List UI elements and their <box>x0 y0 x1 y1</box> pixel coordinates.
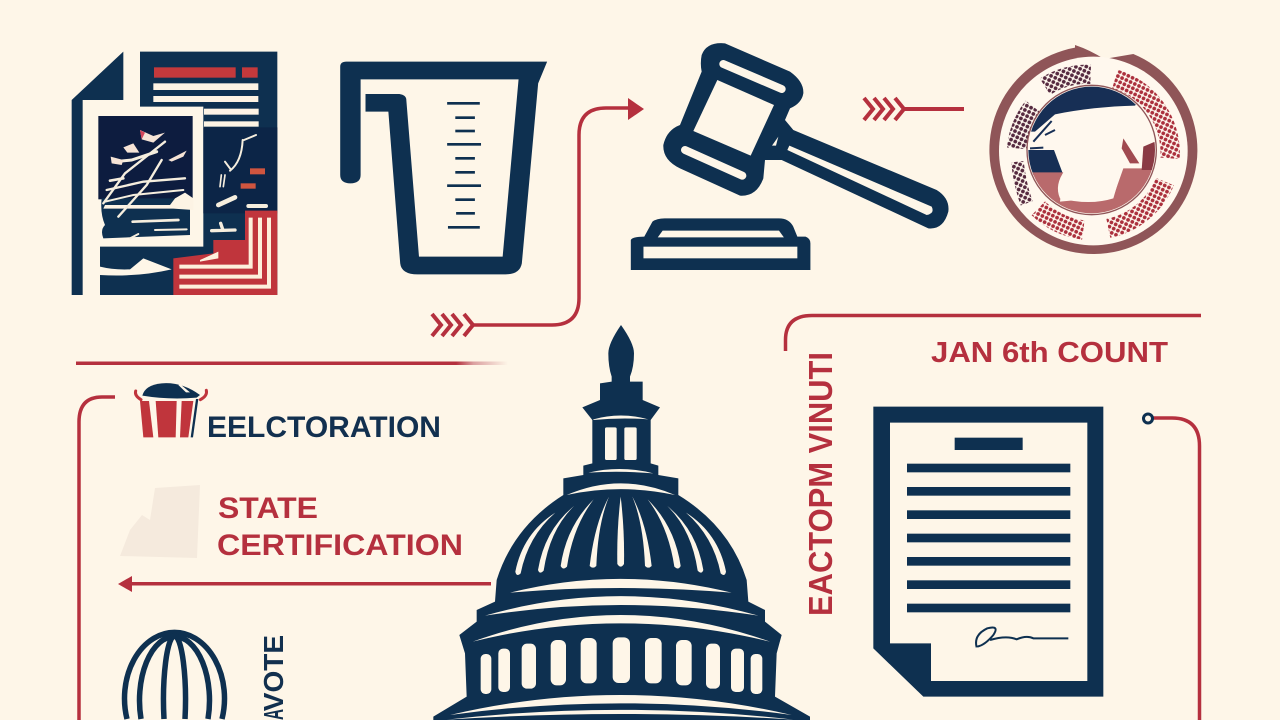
connector: top right frame <box>786 316 1201 351</box>
label: STATE CERTIFICATION <box>217 492 463 562</box>
icon: red pail with navy lid <box>135 383 207 437</box>
label: rotated A VOTE: VOTE <box>258 635 289 711</box>
label: JAN 6th COUNT: JAN 6th COUNT <box>931 337 1168 369</box>
icon: signed document <box>873 407 1103 697</box>
label: STATE CERTIFICATION: STATE <box>218 492 318 525</box>
icon: gavel sound block <box>631 218 810 270</box>
icon: gavel <box>663 43 949 228</box>
label: EELCTORATION: EELCTORATION <box>207 411 441 444</box>
arrow: chevron line to gavel <box>432 98 644 336</box>
arrow: chevron line to seal <box>864 98 964 120</box>
icon: Capitol dome <box>433 325 810 720</box>
label: rotated A VOTE: A <box>258 709 289 720</box>
icon: storm photo inside document <box>98 116 193 238</box>
divider: faded red line <box>76 362 508 365</box>
icon: measuring cup <box>340 62 547 274</box>
connector: dot and line on right <box>1144 414 1200 720</box>
arrow: pointing left <box>118 576 491 592</box>
label: STATE CERTIFICATION: CERTIFICATION <box>217 529 463 562</box>
icon: ballot whisk shape <box>124 632 225 719</box>
connector: left frame <box>79 397 115 720</box>
icon: faint building shape <box>120 485 200 558</box>
icon: ballot document with map <box>72 52 277 295</box>
icon: round seal <box>989 45 1197 254</box>
label: rotated EACTOPM VINUTI: EACTOPM VINUTI <box>802 352 839 616</box>
